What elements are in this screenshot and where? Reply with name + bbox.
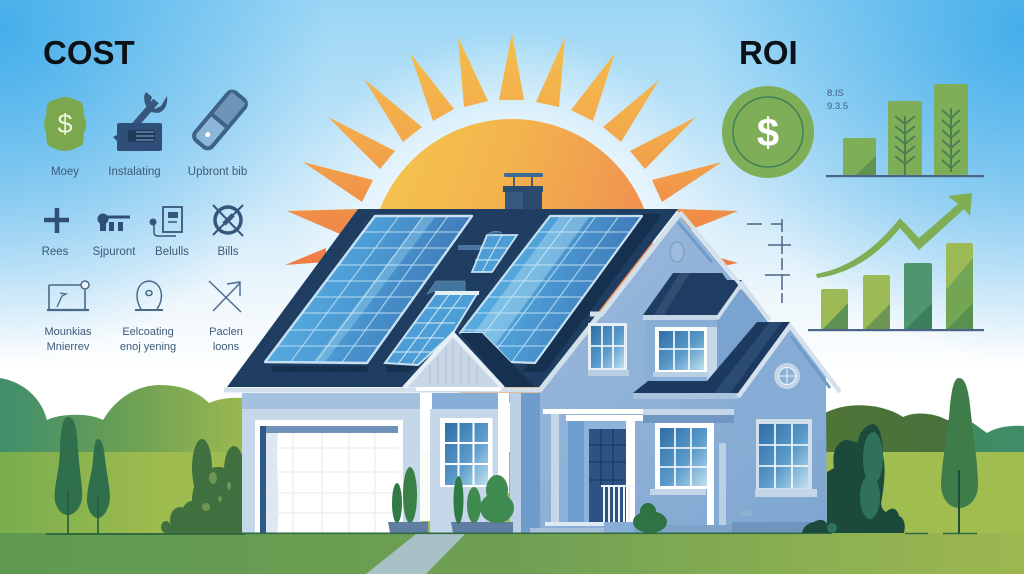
text: row 3 labels (44, 326, 243, 353)
solar panel small upper (472, 231, 517, 272)
text: row 3 labels: Eelcoating (122, 326, 174, 338)
front gable (404, 333, 503, 388)
railing (601, 486, 634, 522)
shrub left of garage (161, 439, 244, 533)
foundation (635, 510, 827, 533)
potted plants (388, 467, 514, 533)
growth arrow (816, 193, 972, 278)
back lawn (0, 452, 1024, 534)
icon: money: $ (57, 109, 73, 139)
roof (227, 209, 678, 387)
text: row 2 labels: Bills (217, 246, 239, 258)
garage door (255, 420, 403, 533)
porch (530, 409, 734, 533)
text: row 2 labels: Sjpuront (93, 246, 136, 258)
icon: ROI dollar coin (722, 86, 814, 178)
garage wing wall (242, 393, 421, 533)
front lawn (0, 533, 1024, 574)
text: row 2 labels: Belulls (155, 246, 189, 258)
icon: crossing arrow (209, 281, 241, 312)
text: row 3 labels: Mounkias (44, 326, 92, 338)
text: row 3 labels: loons (213, 341, 240, 353)
tree right (941, 378, 978, 533)
text: row 3 labels: Mnierrev (47, 341, 90, 353)
icon: laptop (47, 281, 89, 310)
icon: ROI dollar coin: $ (757, 111, 779, 155)
text: row 1 labels: Moey (51, 166, 79, 178)
tick marks (747, 219, 791, 303)
roof eave trim (224, 213, 680, 390)
bar chart: upper (826, 84, 984, 177)
round shrub by porch (633, 503, 667, 533)
round gable window (774, 363, 800, 389)
fern motifs (895, 108, 960, 175)
text: chart values (827, 88, 848, 112)
walkway (366, 534, 465, 574)
dormer (643, 273, 768, 382)
bar chart: lower with arrow (808, 193, 984, 331)
icon: circular marker (135, 281, 163, 310)
heading: COST: COST (43, 34, 135, 71)
chimney (503, 173, 543, 236)
entry section wall (430, 393, 540, 533)
background hills right (825, 405, 1024, 452)
text: chart values: 8.IS (827, 88, 844, 99)
icon: meter device (150, 207, 182, 236)
sun with rays (285, 33, 738, 403)
house (224, 173, 840, 534)
entry window (440, 418, 492, 487)
background hills left (0, 378, 245, 452)
icon: money (44, 97, 86, 151)
lower right window (755, 419, 817, 497)
main right wall (521, 216, 827, 533)
text: row 2 labels (42, 246, 239, 258)
solar panel right (450, 216, 642, 363)
valley (460, 333, 535, 387)
text: row 1 labels (51, 166, 247, 178)
porch columns (416, 386, 509, 521)
front door (589, 429, 626, 522)
solar panel small lower (385, 281, 479, 365)
base line (242, 532, 832, 534)
text: chart values: 9.3.5 (827, 101, 848, 112)
right gable and roof (633, 212, 840, 440)
trees left (46, 417, 245, 534)
text: row 3 labels: enoj yening (120, 341, 176, 353)
text: row 2 labels: Rees (42, 246, 69, 258)
text: row 1 labels: Upbront bib (188, 166, 247, 178)
upper left window (588, 323, 629, 376)
icon: plus (44, 208, 69, 233)
icon: upfront bill device (192, 89, 248, 151)
solar panel left (265, 216, 472, 363)
lower centre window (650, 423, 726, 526)
heading: ROI: ROI (739, 34, 798, 71)
text: row 3 labels: Paclen (209, 326, 243, 338)
shrubs right of house (802, 424, 977, 534)
icon: crossed circle (213, 205, 243, 236)
icon: wrench installation (113, 92, 167, 151)
icon: key (98, 214, 130, 231)
text: row 1 labels: Instalating (108, 166, 161, 178)
